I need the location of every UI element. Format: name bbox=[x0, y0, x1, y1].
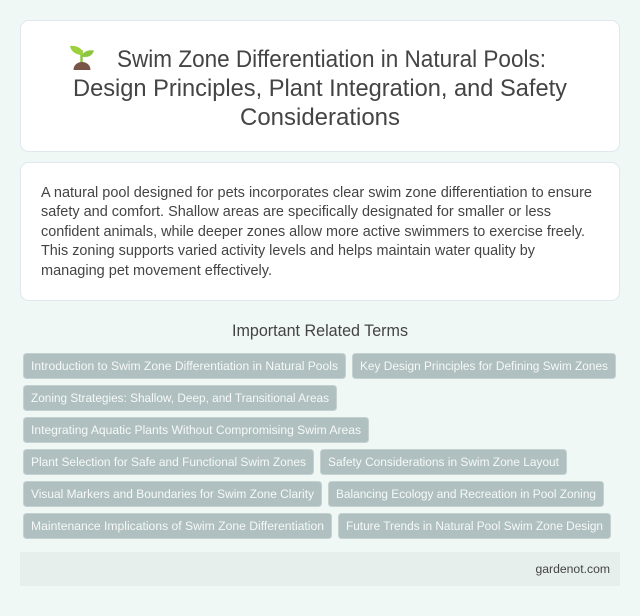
text block: description: managing pet movement effectively. bbox=[41, 263, 272, 279]
chip bbox=[24, 482, 322, 506]
chip: Key Design Principles for Defining Swim Zones bbox=[360, 359, 608, 373]
chip bbox=[338, 514, 610, 538]
chip: Integrating Aquatic Plants Without Compromising Swim Areas bbox=[31, 423, 361, 437]
icon: seedling bbox=[70, 46, 94, 70]
heading: Considerations bbox=[240, 104, 400, 131]
heading bbox=[73, 46, 568, 131]
footer bbox=[20, 552, 620, 586]
chip: Visual Markers and Boundaries for Swim Zone Clarity bbox=[31, 487, 315, 501]
chip bbox=[328, 482, 604, 506]
term chips bbox=[24, 354, 616, 538]
text block: description bbox=[41, 185, 592, 279]
chip: Maintenance Implications of Swim Zone Differentiation bbox=[31, 519, 324, 533]
text block: description: A natural pool designed for pets incorporates clear swim zone differentiation to ensure bbox=[41, 185, 592, 201]
panel: title card bbox=[20, 20, 620, 152]
chip bbox=[24, 418, 368, 442]
text block: description: safety and comfort. Shallow areas are specifically designated for smaller or less bbox=[41, 204, 551, 220]
text block: description: This zoning supports varied activity levels and helps maintain water quality by bbox=[41, 243, 536, 259]
chip: Zoning Strategies: Shallow, Deep, and Transitional Areas bbox=[31, 391, 329, 405]
heading: related terms: Important Related Terms bbox=[232, 322, 408, 340]
text block: description: confident animals, while deeper zones allow more active swimmers to exercise freely. bbox=[41, 224, 585, 240]
chip: Plant Selection for Safe and Functional Swim Zones bbox=[31, 455, 306, 469]
chip bbox=[24, 354, 346, 378]
chip bbox=[24, 450, 314, 474]
chip bbox=[24, 514, 332, 538]
chip bbox=[320, 450, 566, 474]
chip: Introduction to Swim Zone Differentiation in Natural Pools bbox=[31, 359, 338, 373]
footer: gardenot.com bbox=[536, 562, 610, 576]
chip bbox=[352, 354, 616, 378]
panel: description bbox=[20, 162, 620, 300]
chip: Balancing Ecology and Recreation in Pool Zoning bbox=[336, 487, 596, 501]
chip: Safety Considerations in Swim Zone Layout bbox=[328, 455, 560, 469]
chip bbox=[24, 386, 336, 410]
heading: Swim Zone Differentiation in Natural Pools: bbox=[117, 46, 546, 73]
heading: Design Principles, Plant Integration, and Safety bbox=[73, 75, 568, 102]
chip: Future Trends in Natural Pool Swim Zone Design bbox=[346, 519, 603, 533]
